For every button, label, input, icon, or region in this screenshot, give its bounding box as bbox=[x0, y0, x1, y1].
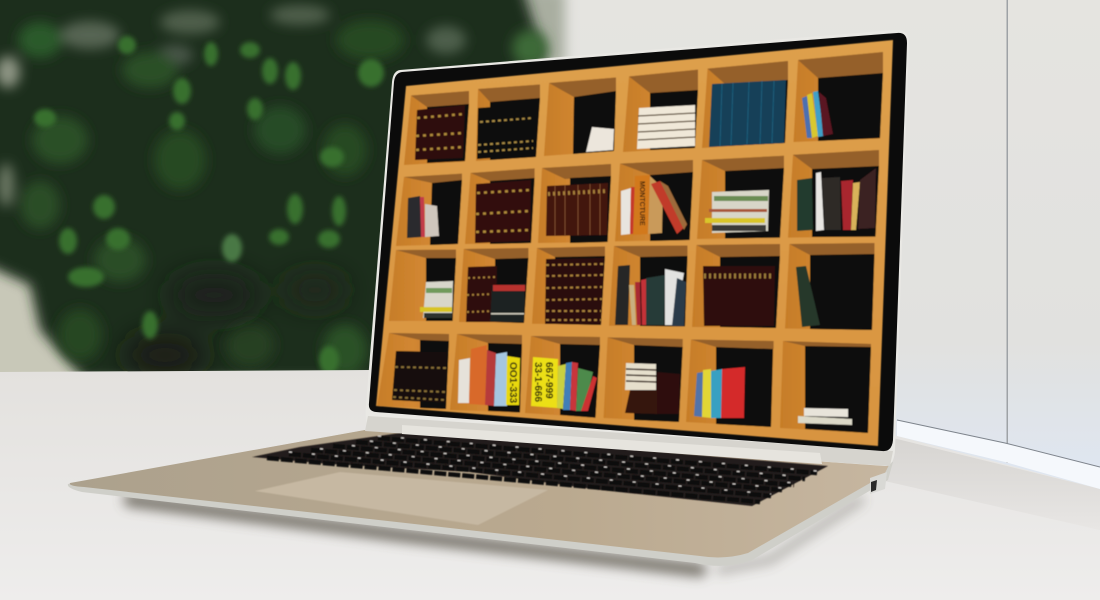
small white stack bbox=[586, 127, 614, 152]
silver lid rim bbox=[366, 30, 909, 466]
background plant foliage bbox=[0, 0, 565, 380]
cell black back panels bbox=[420, 73, 883, 433]
bookshelf on screen bbox=[376, 40, 893, 446]
yellow phone books bbox=[531, 357, 558, 408]
maroon set bbox=[475, 180, 531, 243]
hinge bar bbox=[402, 425, 822, 464]
coloured row bbox=[694, 367, 745, 418]
yellow phone books: 667-999 bbox=[543, 362, 554, 399]
paperbacks bbox=[621, 175, 687, 235]
white and maroon stack bbox=[625, 363, 680, 414]
table surface bbox=[0, 370, 1100, 600]
cell ceilings bbox=[389, 52, 883, 349]
mixed spines bbox=[797, 168, 876, 231]
books row 3 bbox=[420, 258, 820, 327]
mixed spines bbox=[615, 265, 686, 326]
black screen bezel bbox=[369, 33, 907, 451]
blue set bbox=[709, 80, 786, 147]
hinge strip bbox=[365, 416, 893, 466]
laptop base bbox=[68, 430, 893, 566]
black and gold set bbox=[477, 104, 536, 159]
colourful set bbox=[458, 345, 507, 406]
dark stack bbox=[490, 284, 525, 322]
yellow book bbox=[506, 356, 520, 405]
laptop shadow bbox=[130, 500, 860, 570]
yellow book: OO1-333 bbox=[507, 362, 518, 404]
base underside edge bbox=[68, 430, 893, 566]
maroon set bbox=[415, 105, 465, 160]
mixed paperbacks bbox=[557, 362, 597, 411]
maroon gold set bbox=[545, 258, 604, 324]
laptop lid bbox=[365, 30, 909, 466]
side port bbox=[870, 472, 887, 494]
light glow along the wall base bbox=[897, 420, 1100, 489]
books row 1 bbox=[415, 80, 833, 160]
trackpad bbox=[255, 472, 548, 525]
colourful books bbox=[802, 91, 833, 138]
small leaning books bbox=[407, 196, 439, 238]
multi coloured stack bbox=[705, 190, 769, 233]
brown set bbox=[546, 183, 608, 236]
books row 4 bbox=[392, 345, 852, 425]
orange book: MONTCTURE bbox=[638, 181, 645, 226]
skirting line bbox=[897, 420, 1100, 467]
yellow phone books: 33-1-666 bbox=[532, 362, 543, 402]
grey table band near the wall bbox=[880, 436, 1100, 530]
keyboard bbox=[252, 433, 828, 506]
black and gold set bbox=[392, 351, 447, 403]
green and white stack bbox=[420, 281, 453, 318]
palm rest deck bbox=[70, 430, 890, 557]
leaning green book bbox=[796, 266, 820, 327]
white flat books bbox=[798, 408, 852, 425]
maroon set bbox=[703, 266, 775, 326]
shelf frame bbox=[376, 40, 893, 446]
books row 2 bbox=[407, 168, 876, 243]
port opening bbox=[871, 480, 877, 492]
white book stack bbox=[637, 105, 695, 149]
cell walls bbox=[377, 52, 883, 433]
maroon volume bbox=[466, 266, 497, 322]
